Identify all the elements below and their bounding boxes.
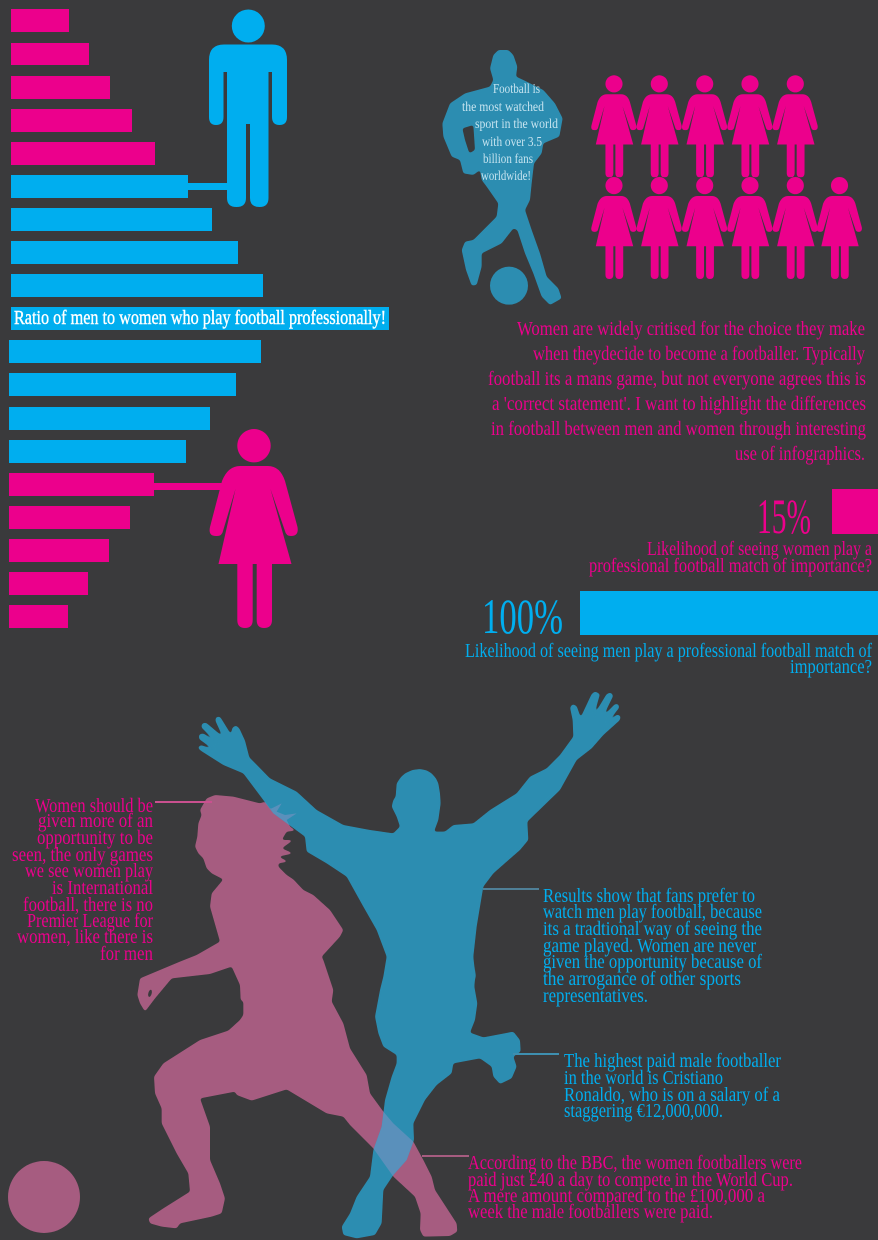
- stat: 15% women: 15%: [757, 488, 811, 544]
- ball: mauve circle: [8, 1161, 80, 1233]
- text: women should be given opportunity: opportunity to be: [37, 827, 153, 849]
- connector: bar to man icon: [188, 183, 228, 190]
- text: women should be given opportunity: we see women play: [25, 860, 153, 882]
- text: results show fans prefer men: [483, 885, 762, 1007]
- text: results show fans prefer men: game played. Women are never: [543, 935, 756, 957]
- detail: gap in female hand: [147, 989, 153, 997]
- text: highest paid male footballer: staggering €12,000,000.: [564, 1100, 723, 1122]
- text: women should be given opportunity: is International: [52, 877, 153, 899]
- text: highest paid male footballer: The highest paid male footballer: [564, 1050, 781, 1072]
- silhouette: male footballer: [198, 691, 621, 1238]
- text: most watched sport: [462, 82, 558, 184]
- bar chart: ratio lower stack: [9, 340, 261, 628]
- text: women should be given opportunity: for men: [100, 943, 153, 965]
- heading: ratio label: Ratio of men to women who play football professionally!: [14, 307, 386, 329]
- text: BBC pay comparison: [422, 1152, 802, 1223]
- text: women should be given opportunity: [12, 795, 212, 965]
- icon: man: [209, 10, 287, 207]
- text: most watched sport: the most watched: [462, 100, 544, 115]
- bar chart: ratio upper stack: [11, 9, 263, 297]
- text: highest paid male footballer: [513, 1050, 781, 1122]
- text: introduction paragraph: [488, 318, 866, 465]
- text: BBC pay comparison: A mere amount compared to the £100,000 a: [468, 1185, 765, 1207]
- text: results show fans prefer men: the arrogance of other sports: [543, 968, 741, 990]
- text: women should be given opportunity: given more of an: [38, 810, 153, 832]
- text: most watched sport: worldwide!: [481, 169, 531, 184]
- overlap of silhouettes: [264, 802, 414, 1176]
- text: most watched sport: sport in the world: [475, 117, 558, 132]
- icon: small footballer silhouette: [442, 50, 563, 305]
- text: most watched sport: Football is: [493, 82, 540, 97]
- icon group: eleven women: [591, 75, 862, 279]
- text: results show fans prefer men: representatives.: [543, 985, 648, 1007]
- text: results show fans prefer men: Results show that fans prefer to: [543, 885, 755, 907]
- text: women should be given opportunity: Women should be: [35, 795, 153, 817]
- text: women should be given opportunity: Premier League for: [27, 910, 153, 932]
- text: results show fans prefer men: given the opportunity because of: [543, 951, 762, 973]
- text: BBC pay comparison: According to the BBC, the women footballers were: [468, 1152, 802, 1174]
- icon: woman: [210, 429, 298, 628]
- text: BBC pay comparison: paid just £40 a day to compete in the World Cup.: [468, 1169, 793, 1191]
- text: most watched sport: billion fans: [483, 152, 533, 167]
- text: highest paid male footballer: in the world is Cristiano: [564, 1067, 723, 1089]
- text: women should be given opportunity: seen, the only games: [12, 844, 153, 866]
- text: women should be given opportunity: football, there is no: [23, 894, 153, 916]
- silhouette: female footballer: [137, 795, 457, 1237]
- text: women should be given opportunity: women, like there is: [17, 926, 153, 948]
- text: highest paid male footballer: Ronaldo, who is on a salary of a: [564, 1084, 780, 1106]
- text: results show fans prefer men: watch men play football, because: [543, 901, 762, 923]
- stat: 100% men: [465, 588, 878, 678]
- connector: bar to woman icon: [154, 483, 224, 490]
- illustration: female and male footballers overlapping: [137, 691, 621, 1238]
- text: results show fans prefer men: its a tradtional way of seeing the: [543, 918, 762, 940]
- stat: 15% women: [589, 488, 878, 577]
- text: most watched sport: with over 3.5: [482, 135, 542, 150]
- text: BBC pay comparison: week the male footballers were paid.: [468, 1201, 713, 1223]
- stat: 100% men: 100%: [482, 588, 563, 644]
